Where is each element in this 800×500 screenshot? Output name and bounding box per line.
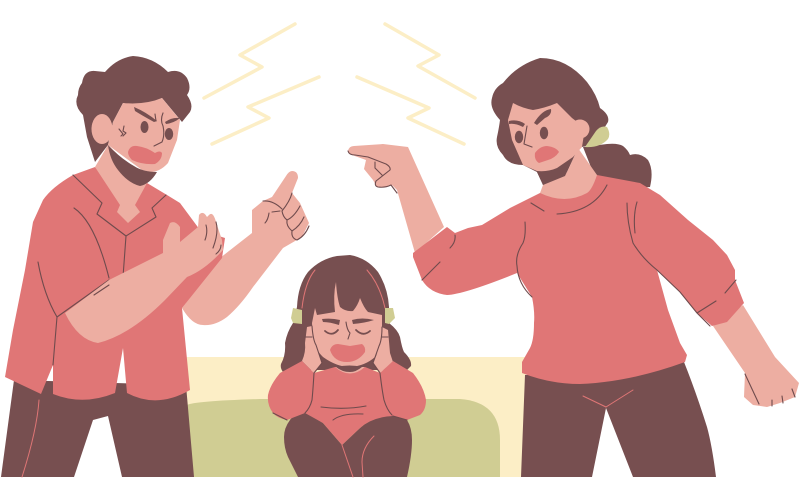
child closed eyes and brows bbox=[322, 318, 374, 339]
lightning bolts bbox=[204, 24, 475, 144]
child sweater bbox=[268, 361, 426, 445]
bolt: upper right bbox=[385, 24, 475, 98]
bolt: lower right bbox=[357, 77, 464, 144]
child leg lines bbox=[342, 436, 374, 477]
child crying mouth bbox=[330, 344, 365, 362]
father far arm with pointing hand bbox=[182, 171, 309, 325]
mother ponytail and back hair bbox=[583, 144, 652, 190]
child chin and neck bbox=[335, 367, 365, 374]
father shouting mouth bbox=[128, 146, 162, 164]
bolt: upper left bbox=[204, 24, 295, 98]
father eyes and brows bbox=[119, 107, 180, 146]
father near arm and hand bbox=[65, 213, 223, 343]
child hair bbox=[281, 255, 411, 372]
mother shouting mouth bbox=[535, 146, 559, 163]
mother eyes and brows bbox=[509, 109, 551, 147]
child left hand bbox=[302, 326, 322, 373]
father shirt bbox=[5, 167, 225, 400]
child sweater seams bbox=[273, 373, 407, 420]
figure: mother bbox=[348, 58, 799, 477]
father face bbox=[108, 98, 180, 172]
father neck bbox=[95, 145, 147, 223]
background: cream wall panel bbox=[186, 357, 526, 477]
child face bbox=[312, 282, 382, 367]
figure: child bbox=[268, 255, 426, 477]
father ear bbox=[92, 114, 112, 144]
father trousers bbox=[1, 380, 194, 477]
child legs bbox=[284, 412, 412, 477]
father beard bbox=[108, 145, 157, 186]
mother sweater seams bbox=[422, 185, 736, 326]
mother hair bbox=[491, 58, 608, 185]
mother pointing arm bbox=[348, 144, 444, 253]
mother trousers bbox=[521, 362, 716, 477]
mother face bbox=[508, 103, 585, 171]
mother lowered arm and fist bbox=[713, 305, 799, 407]
child headband lines bbox=[302, 270, 385, 308]
child right hand bbox=[373, 327, 393, 373]
bolt: lower left bbox=[212, 77, 319, 144]
father hair bbox=[76, 56, 191, 162]
mother sweater bbox=[413, 175, 744, 384]
figure: father bbox=[1, 56, 309, 477]
mother neck bbox=[540, 148, 597, 199]
father shirt seams bbox=[38, 175, 166, 365]
sofa bbox=[187, 399, 500, 477]
mother ear bbox=[570, 120, 590, 138]
child hair ties bbox=[291, 308, 395, 324]
mother hair tie bbox=[585, 126, 609, 147]
